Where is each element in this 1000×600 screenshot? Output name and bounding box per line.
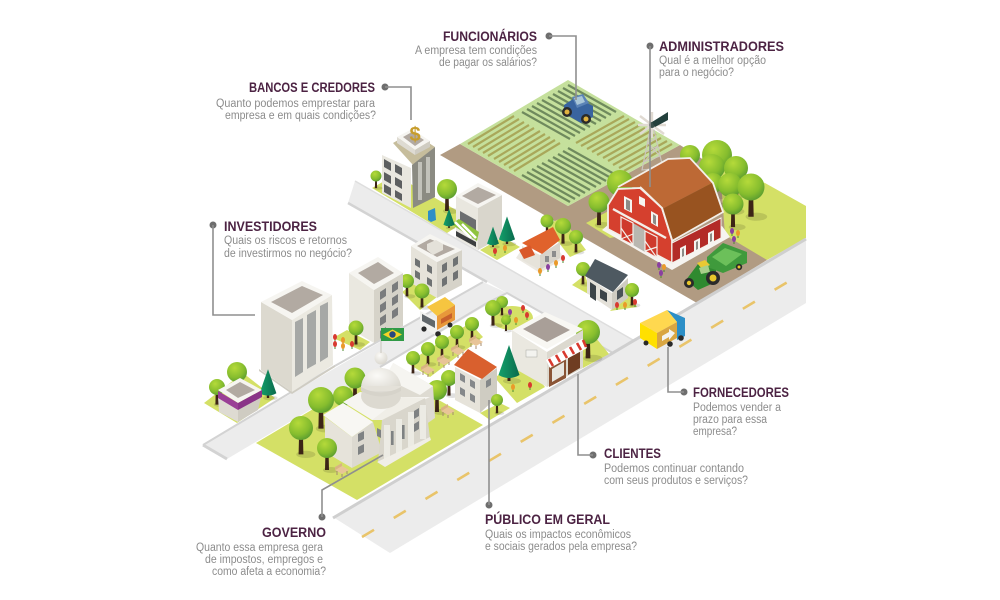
label: funcionários: A empresa tem condições: [415, 45, 537, 57]
tree and flowers: grey house: [615, 283, 640, 310]
label: funcionários: [415, 29, 576, 100]
flowers: office plot: [333, 334, 354, 351]
label: bancos e credores: BANCOS E CREDORES: [249, 80, 375, 95]
icon: green tractor and trailer: [684, 243, 747, 290]
label: governo: como afeta a economia?: [212, 566, 326, 578]
label: governo: [196, 455, 383, 578]
lawn: government square: [256, 368, 483, 500]
ground: lawn beside barn: [586, 205, 640, 238]
icon: office tower: [259, 281, 335, 394]
label: fornecedores: prazo para essa: [693, 414, 768, 426]
lawn: round garden: [491, 306, 533, 330]
trees: pines by shop: [487, 216, 516, 249]
lawn: house corner plot: [480, 403, 510, 420]
label: público em geral: Quais os impactos econômicos: [485, 529, 631, 541]
lawn: residential plot: [402, 280, 437, 310]
road: main avenue: [333, 238, 806, 553]
tree: house back: [441, 370, 459, 398]
icon: bank tower: [382, 124, 435, 208]
lawn: kiosk plot: [204, 373, 275, 423]
icons: park benches: [421, 335, 483, 377]
road: cross street: [203, 282, 613, 459]
label: administradores: [646, 39, 784, 187]
label: clientes: com seus produtos e serviços?: [604, 475, 748, 487]
tree: behind shop: [576, 320, 602, 362]
lawn: bench strip: [407, 323, 483, 377]
icon: orange-roof townhouse: [454, 349, 497, 413]
label: bancos e credores: empresa e em quais condições?: [225, 110, 376, 122]
label: governo: GOVERNO: [262, 525, 326, 540]
trees: bench row: [406, 317, 480, 376]
icon: bank tower: $: [409, 124, 421, 146]
icon: Brazilian flag: [381, 328, 404, 353]
label: bancos e credores: Quanto podemos emprestar para: [216, 98, 376, 110]
flowers: pine plot: [493, 245, 507, 256]
tree: pine near mailbox: [443, 209, 455, 230]
icon: striped awning shop: [451, 183, 502, 250]
icon: tall apartment building: [349, 257, 403, 343]
tree: pine and flowers corner plot: [498, 345, 532, 392]
icon: grey-roof house: [585, 259, 628, 310]
label: público em geral: PÚBLICO EM GERAL: [485, 512, 610, 527]
lawn: shop plot: [583, 322, 609, 368]
label: fornecedores: empresa?: [693, 426, 737, 438]
lawn: red house plot: [545, 218, 586, 257]
trees: red house: [540, 214, 584, 254]
icon: mailbox: [428, 208, 436, 222]
label: fornecedores: Podemos vender a: [693, 402, 782, 414]
icon: mid-rise residential building: [411, 234, 462, 298]
label: governo: de impostos, empregos e: [205, 554, 323, 566]
lawn: corner pine plot: [495, 355, 545, 403]
label: administradores: para o negócio?: [659, 67, 734, 79]
label: clientes: Podemos continuar contando: [604, 463, 744, 475]
label: clientes: CLIENTES: [604, 446, 661, 461]
icon: blue tractor: [562, 94, 593, 124]
trees: bank block: [370, 170, 459, 214]
flowers: barn: [657, 228, 740, 278]
label: clientes: [578, 374, 748, 487]
label: funcionários: FUNCIONÁRIOS: [443, 29, 537, 44]
label: administradores: ADMINISTRADORES: [659, 39, 784, 54]
trees: capitol front: [289, 416, 339, 473]
tree: townhouse corner: [491, 394, 504, 415]
label: investidores: [210, 219, 352, 315]
lawn: bank block: [372, 175, 470, 233]
icon: red-roof house: [516, 227, 565, 276]
icon: purple kiosk: [218, 378, 262, 422]
label: público em geral: e sociais gerados pela empresa?: [485, 541, 637, 553]
icon: orange delivery truck: [420, 297, 455, 337]
trees: residential plot: [400, 274, 431, 310]
label: funcionários: de pagar os salários?: [439, 57, 537, 69]
lawn: pine plot: [480, 237, 520, 260]
road markings: [362, 271, 806, 537]
label: investidores: Quais os riscos e retornos: [224, 235, 347, 247]
trees: behind barn: [588, 140, 767, 230]
label: administradores: Qual é a melhor opção: [659, 55, 766, 67]
tree: office plot: [348, 320, 365, 347]
lawn: grey house plots: [572, 275, 637, 311]
trees: kiosk: [209, 362, 278, 407]
trees: round garden: [485, 296, 512, 332]
icon: windmill: [638, 112, 668, 170]
label: governo: Quanto essa empresa gera: [196, 542, 324, 554]
road: bank street: [348, 181, 633, 353]
barn: [602, 158, 730, 270]
trees: grey house back: [576, 262, 591, 286]
label: fornecedores: [668, 347, 789, 438]
icon: red awning shop: [512, 312, 587, 387]
label: fornecedores: FORNECEDORES: [693, 385, 789, 400]
ground: farm lawn: [720, 168, 806, 260]
ground: farm soil: [440, 144, 767, 303]
flowers: round garden: [508, 305, 529, 325]
label: investidores: de investirmos no negócio?: [224, 248, 352, 260]
label: público em geral: [485, 400, 637, 553]
label: investidores: INVESTIDORES: [224, 219, 317, 234]
label: bancos e credores: [216, 80, 411, 122]
icons: square benches: [335, 404, 455, 477]
trees: capitol back: [308, 368, 449, 432]
icon: yellow supplier truck: [640, 310, 685, 349]
lawn: office plot: [333, 330, 370, 350]
ground: crop field: [460, 80, 680, 206]
icon: capitol building: [323, 352, 435, 468]
